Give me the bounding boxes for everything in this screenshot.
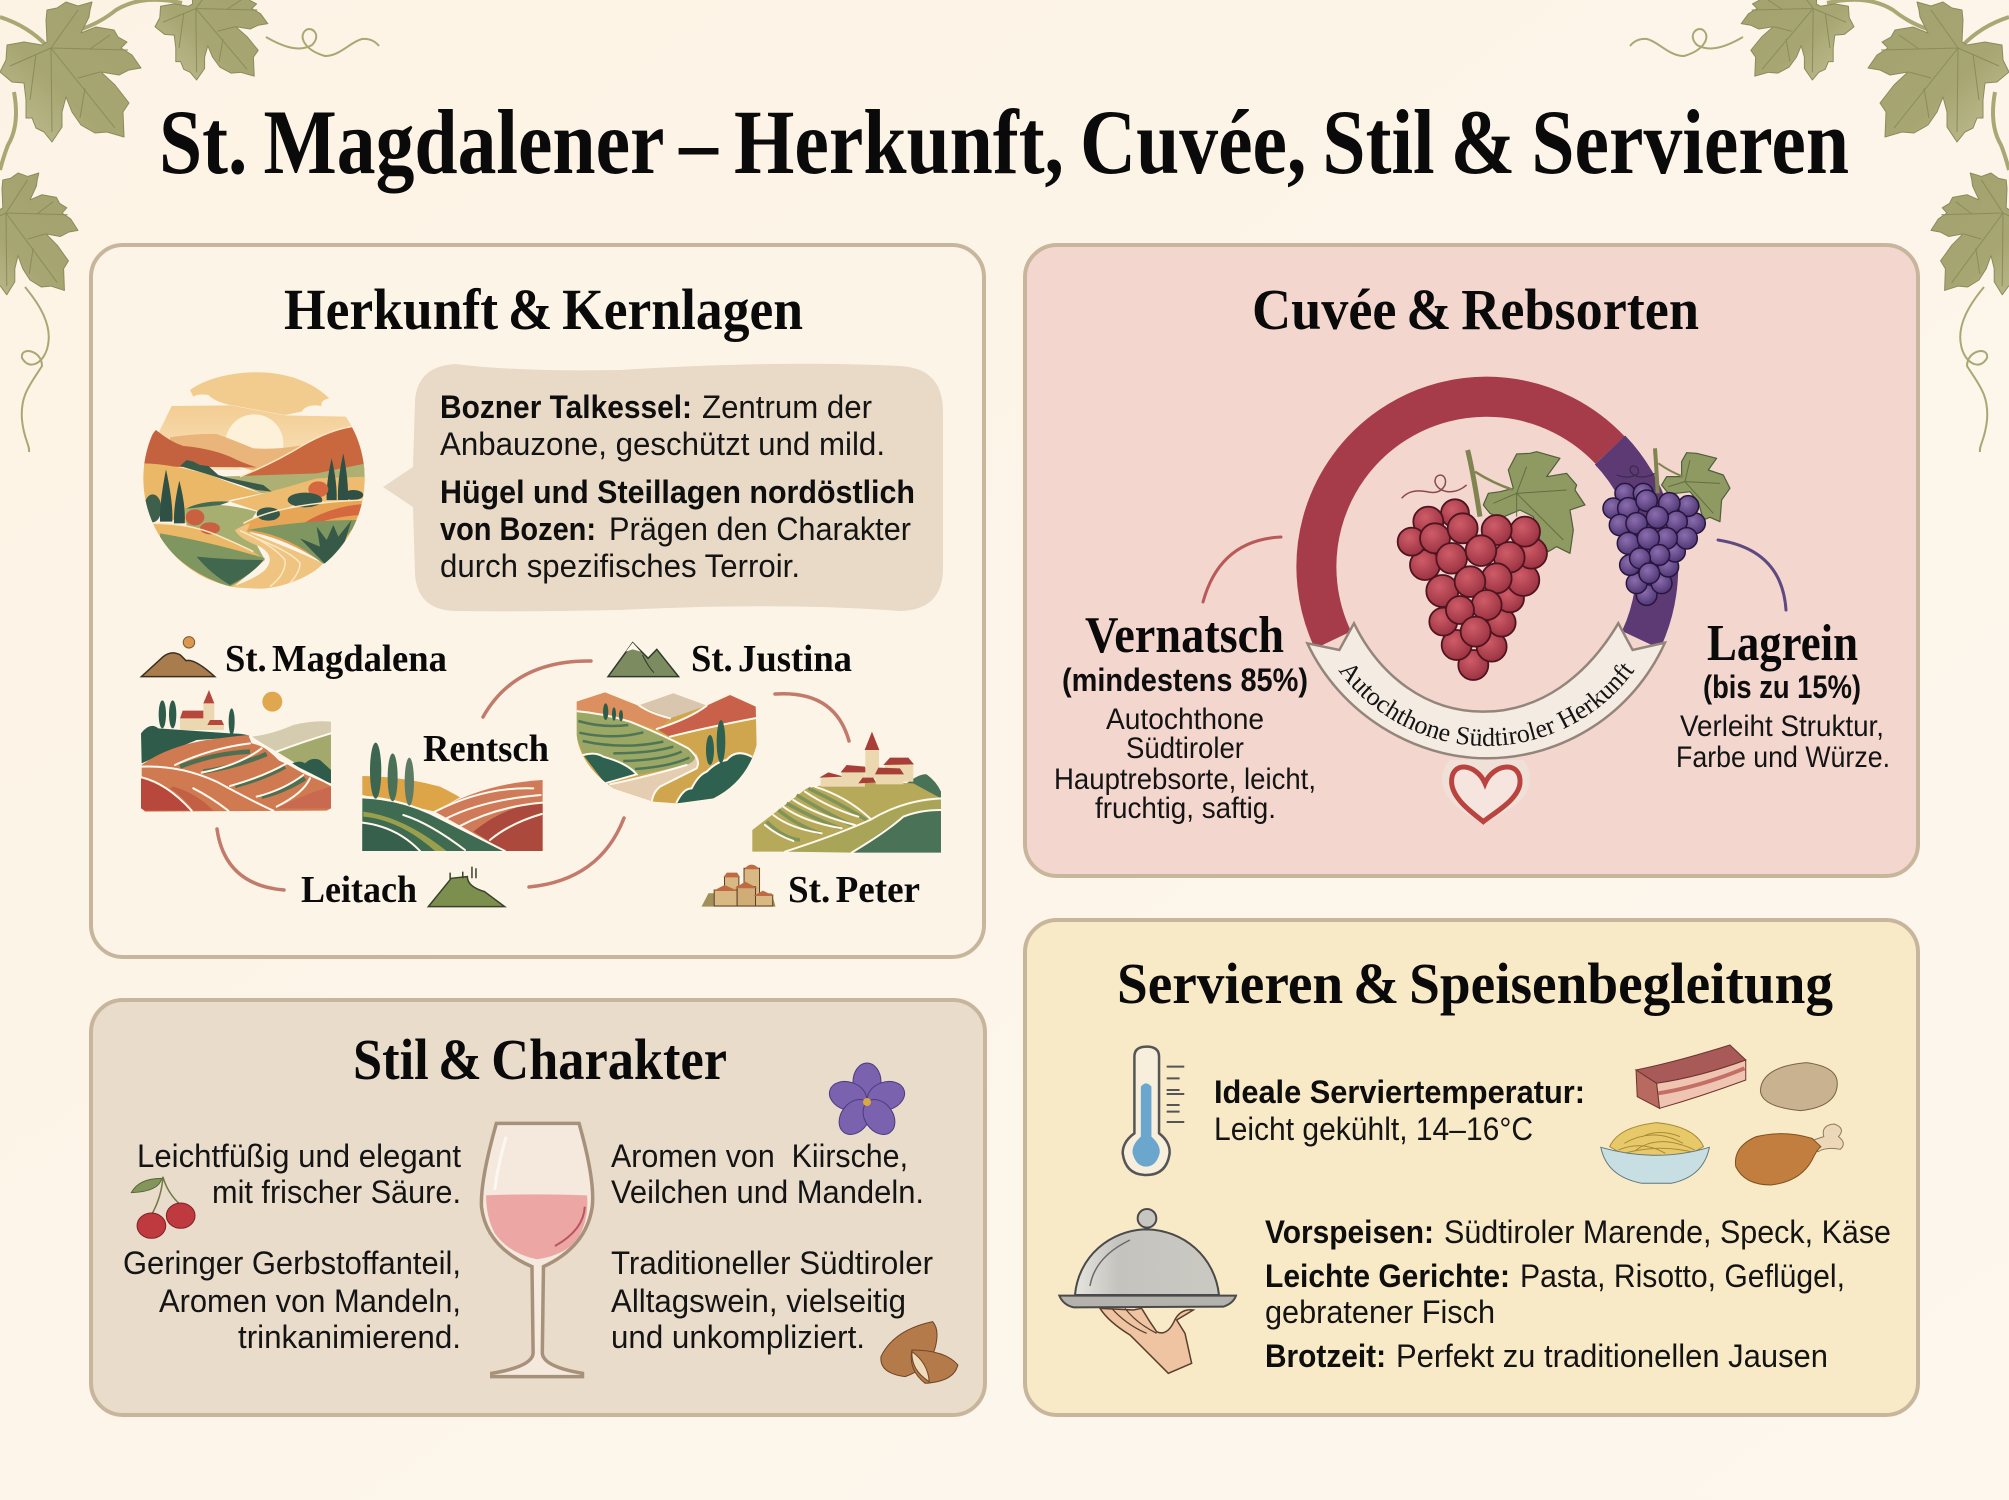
text block: serving temperature — [1214, 1074, 1585, 1147]
callout: Bozner Talkessel — [383, 364, 943, 611]
text block: Lagrein: Verleiht Struktur, — [1680, 710, 1884, 743]
icon: Lagrein grape cluster — [1603, 448, 1730, 605]
location: St. Magdalena: St. Magdalena — [225, 638, 447, 680]
callout: Bozner Talkessel: Prägen den Charakter — [609, 511, 911, 547]
text block: serving temperature: Leicht gekühlt, 14–16°C — [1214, 1111, 1533, 1147]
callout: Bozner Talkessel: durch spezifisches Terroir. — [440, 548, 800, 584]
icon: thermometer — [1123, 1047, 1184, 1175]
text block: food pairing: Perfekt zu traditionellen Jausen — [1396, 1338, 1828, 1374]
text block: Vernatsch: fruchtig, saftig. — [1095, 792, 1276, 825]
callout: Bozner Talkessel: Anbauzone, geschützt und mild. — [440, 426, 885, 462]
location: St. Peter — [702, 865, 920, 911]
callout: Bozner Talkessel: Bozner Talkessel: — [440, 389, 692, 425]
panel: Herkunft & Kernlagen — [91, 245, 984, 957]
heading: Herkunft & Kernlagen: Herkunft & Kernlagen — [284, 277, 803, 342]
callout: Bozner Talkessel: Hügel und Steillagen nordöstlich — [440, 474, 915, 510]
text block: Vernatsch: Autochthone — [1106, 703, 1264, 736]
ring: Lagrein share — [1610, 450, 1657, 640]
icon: chicken leg — [1735, 1124, 1843, 1185]
callout: Bozner Talkessel: Zentrum der — [702, 389, 872, 425]
text block: Lagrein — [1676, 615, 1890, 774]
panel: Stil & Charakter — [91, 1000, 985, 1415]
vineyard illustration: St. Magdalena — [141, 690, 331, 812]
illustration: sunset landscape circle — [140, 372, 367, 590]
heading: Stil & Charakter: Stil & Charakter — [353, 1027, 727, 1092]
text block: Lagrein: Farbe und Würze. — [1676, 741, 1890, 774]
location: St. Justina: St. Justina — [691, 638, 852, 680]
arc: Lagrein pointer — [1718, 540, 1786, 610]
text block: style right: und unkompliziert. — [611, 1319, 865, 1355]
text block: food pairing: Brotzeit: — [1265, 1338, 1386, 1374]
ribbon: Autochthone Südtiroler Herkunft — [1305, 620, 1667, 760]
text block: Vernatsch: Südtiroler — [1126, 732, 1244, 765]
text block: Lagrein: Lagrein — [1707, 615, 1858, 672]
location: St. Peter: St. Peter — [788, 869, 920, 911]
heading: Servieren & Speisenbegleitung: Servieren & Speisenbegleitung — [1117, 951, 1833, 1016]
icon: violet flower — [826, 1063, 908, 1141]
text block: food pairing: Leichte Gerichte: — [1265, 1258, 1510, 1294]
location: Leitach: Leitach — [301, 869, 417, 911]
text block: Vernatsch: (mindestens 85%) — [1062, 662, 1308, 698]
icon: heart medallion — [1442, 760, 1530, 823]
callout: Bozner Talkessel: von Bozen: — [440, 511, 596, 547]
icon: bread cheese — [1760, 1063, 1837, 1111]
text block: style right: Alltagswein, vielseitig — [611, 1283, 906, 1319]
text block: food pairing: gebratener Fisch — [1265, 1294, 1495, 1330]
text block: Vernatsch — [1054, 607, 1316, 825]
icon: cherries — [131, 1177, 195, 1238]
vineyard illustration: Rentsch — [362, 743, 543, 851]
vineyard illustration: St. Peter — [752, 732, 941, 853]
location: Leitach — [301, 867, 505, 911]
text block: style right: Aromen von Kiirsche, — [611, 1138, 908, 1174]
icon: speck — [1636, 1045, 1746, 1108]
ribbon: Autochthone Südtiroler Herkunft: Autochthone Südtiroler Herkunft — [1338, 664, 1634, 746]
text block: style left: mit frischer Säure. — [212, 1174, 461, 1210]
text block: Vernatsch: Vernatsch — [1085, 607, 1284, 664]
icon: wine glass — [481, 1123, 593, 1377]
icon: Vernatsch grape cluster — [1398, 450, 1585, 680]
panel: Cuvée & Rebsorten — [1023, 243, 1920, 878]
text block: style left: trinkanimierend. — [238, 1319, 461, 1355]
heading: Cuvée & Rebsorten: Cuvée & Rebsorten — [1252, 277, 1699, 342]
text block: Lagrein: (bis zu 15%) — [1703, 669, 1861, 705]
text block: style left: Geringer Gerbstoffanteil, — [123, 1245, 461, 1281]
icon: almonds — [881, 1322, 958, 1383]
icon: cloche on hand — [1059, 1209, 1236, 1373]
icon: pasta bowl — [1601, 1123, 1709, 1183]
vine decoration: top left — [0, 0, 379, 452]
vine decoration: top right — [1630, 0, 2009, 452]
text block: food pairing: Südtiroler Marende, Speck, Käse — [1444, 1214, 1891, 1250]
text block: food pairing: Pasta, Risotto, Geflügel, — [1520, 1258, 1845, 1294]
ring: Vernatsch share — [1316, 397, 1610, 640]
arc: Vernatsch pointer — [1203, 537, 1281, 602]
location: St. Justina — [608, 638, 852, 680]
connecting arcs between vineyards — [217, 661, 849, 890]
vineyard illustration: St. Justina — [575, 692, 758, 805]
text block: style right: Veilchen und Mandeln. — [611, 1174, 924, 1210]
text block: style left: Leichtfüßig und elegant — [137, 1138, 461, 1174]
text block: serving temperature: Ideale Serviertemperatur: — [1214, 1074, 1585, 1110]
text block: food pairing: Vorspeisen: — [1265, 1214, 1434, 1250]
text block: food pairing — [1265, 1214, 1891, 1374]
text block: style right — [611, 1138, 933, 1355]
panel: Servieren & Speisenbegleitung — [1025, 920, 1918, 1415]
text block: style right: Traditioneller Südtiroler — [611, 1245, 933, 1281]
text block: style left: Aromen von Mandeln, — [159, 1283, 461, 1319]
text block: style left — [123, 1138, 461, 1355]
location label: Rentsch: Rentsch — [423, 728, 549, 770]
text block: Vernatsch: Hauptrebsorte, leicht, — [1054, 763, 1316, 796]
location: St. Magdalena — [141, 637, 447, 680]
